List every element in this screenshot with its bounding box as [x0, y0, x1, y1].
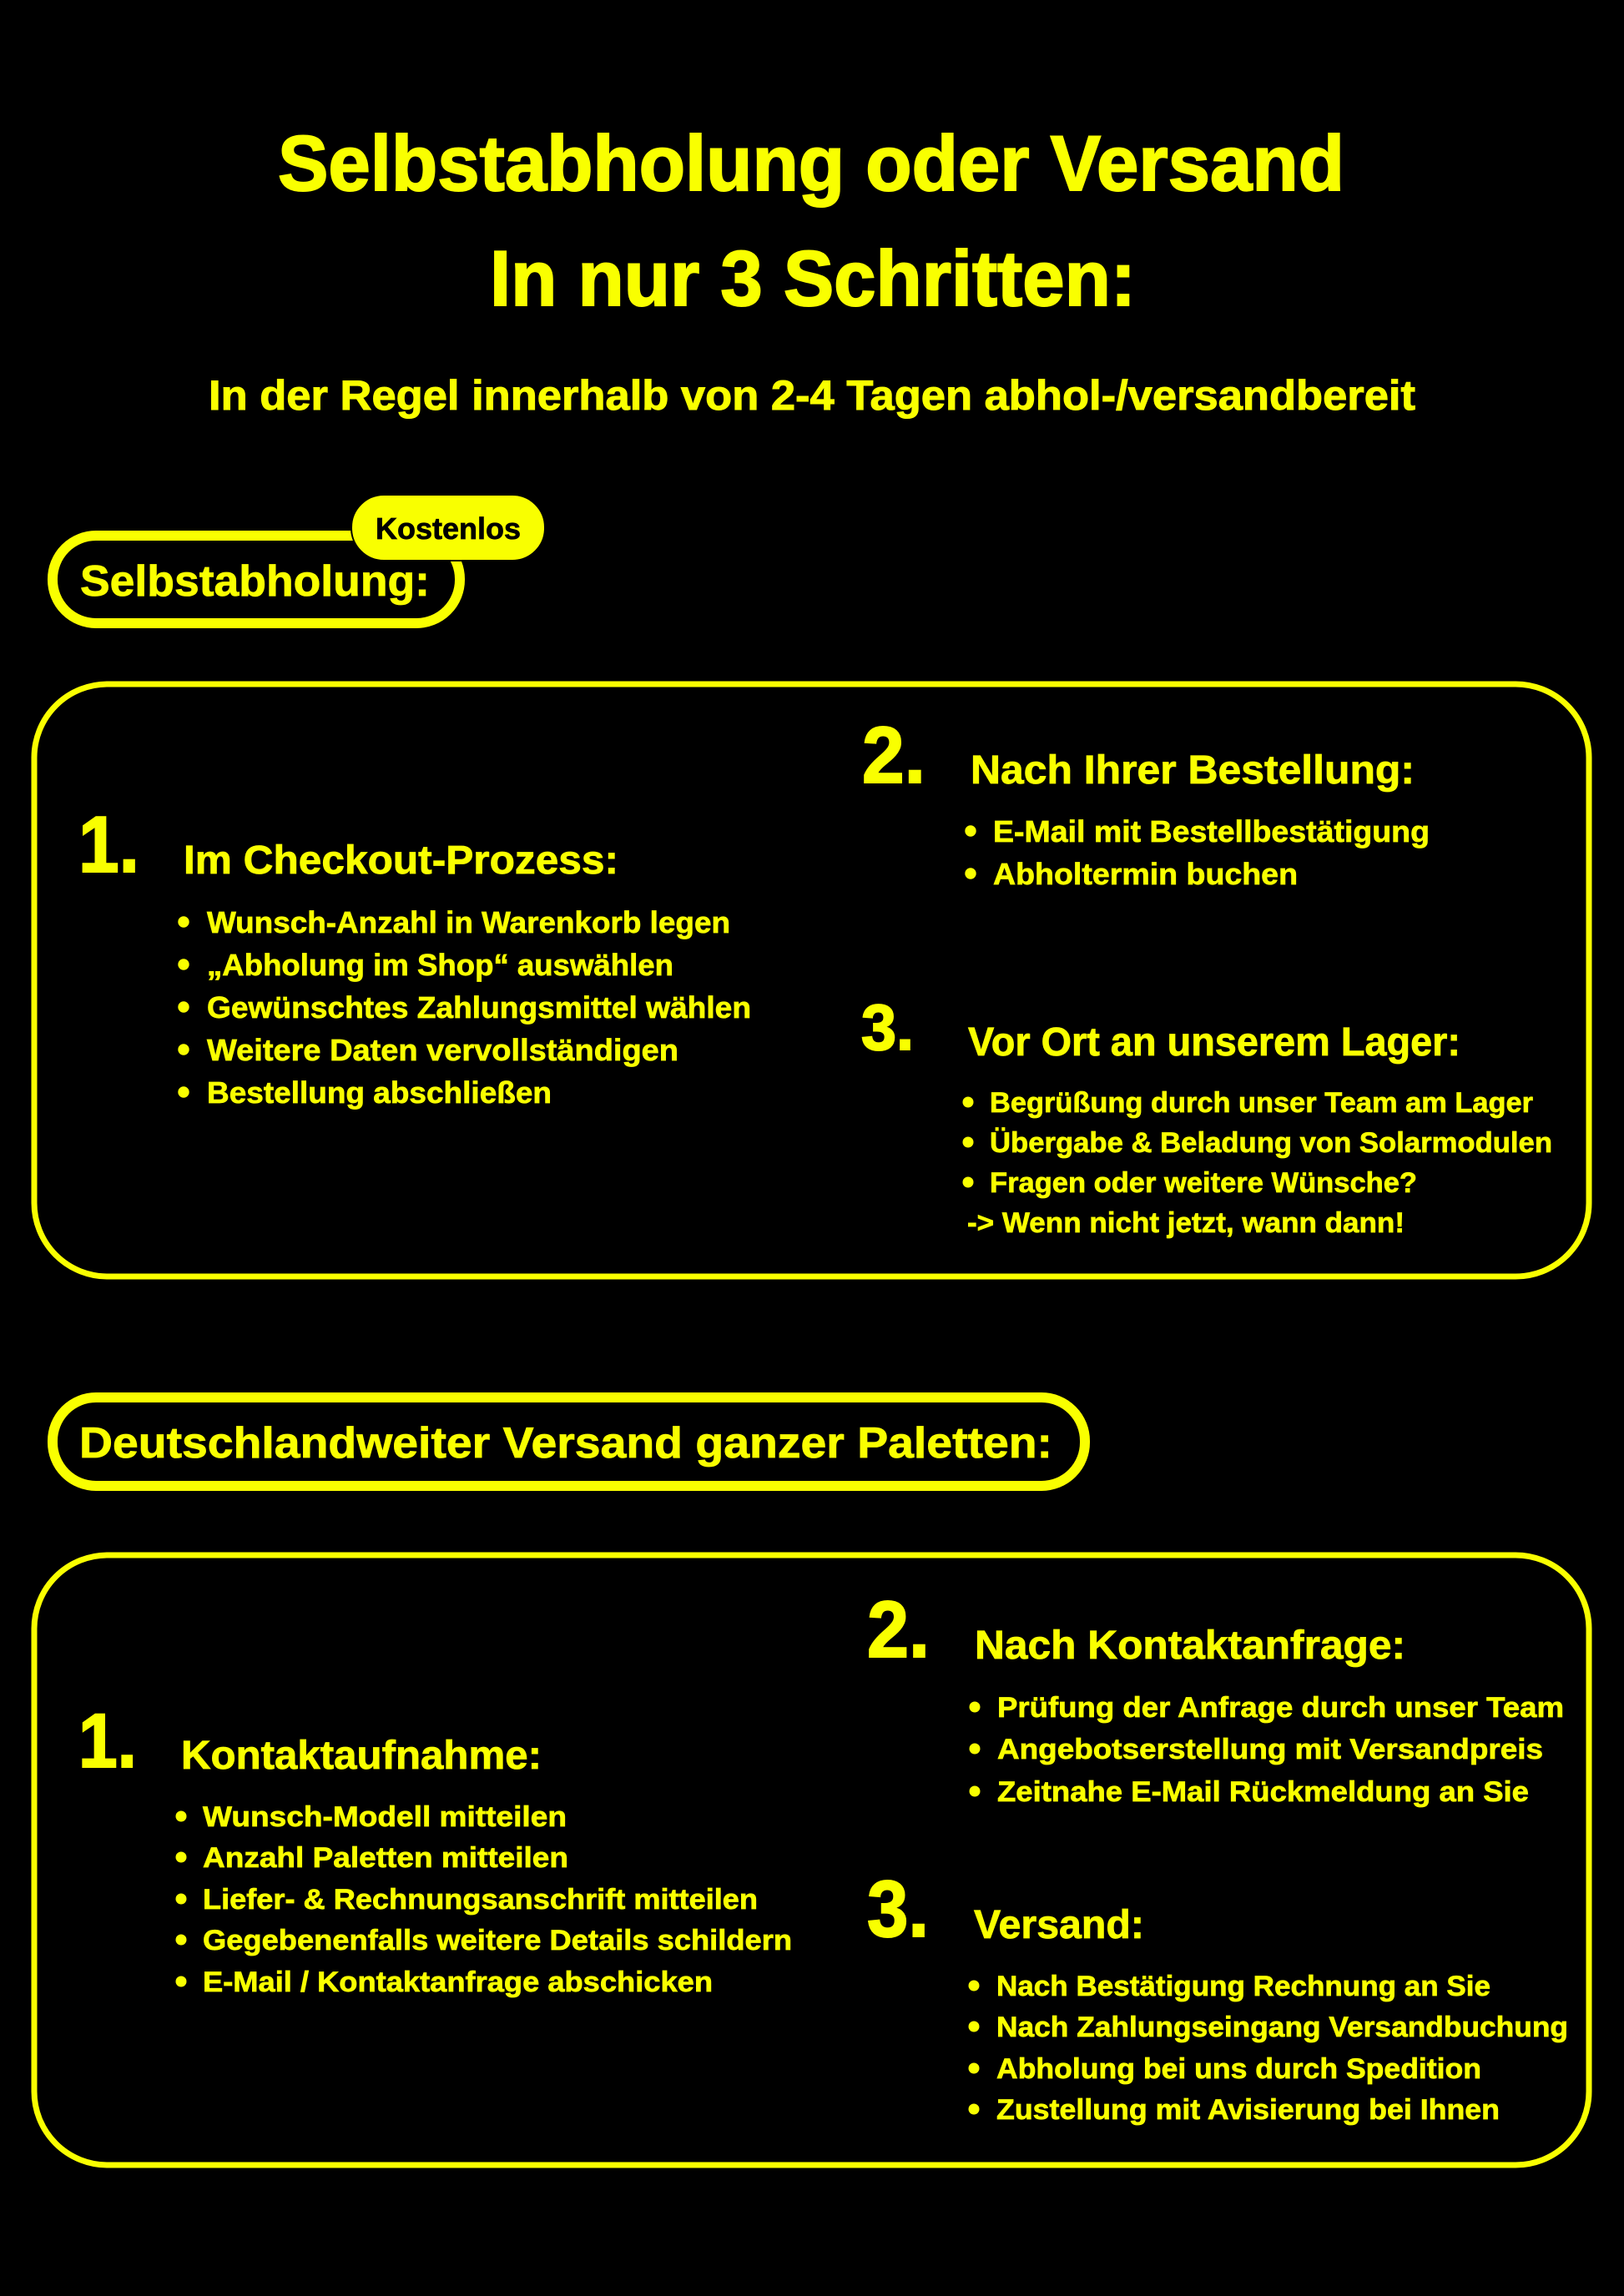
step 3: Versand: 3.	[867, 1865, 929, 1954]
step 3: Vor Ort an unserem Lager: Begrüßung durch unser Team am Lager	[990, 1087, 1533, 1119]
step 3: Vor Ort an unserem Lager: Fragen oder weitere Wünsche?	[990, 1167, 1417, 1199]
subtitle: In der Regel innerhalb von 2-4 Tagen abhol-/versandbereit	[209, 372, 1415, 419]
step 1: Im Checkout-Prozess: Bestellung abschließen	[207, 1075, 552, 1110]
step 1: Kontaktaufnahme: Anzahl Paletten mitteilen	[203, 1842, 568, 1874]
badge: Kostenlos: Kostenlos	[376, 511, 521, 546]
step 2: Nach Ihrer Bestellung: Abholtermin buchen	[993, 857, 1298, 891]
step 1: Kontaktaufnahme: Gegebenenfalls weitere Details schildern	[203, 1925, 792, 1956]
step 2: Nach Kontaktanfrage: Angebotserstellung mit Versandpreis	[997, 1734, 1543, 1765]
step 2: Nach Ihrer Bestellung: E-Mail mit Bestellbestätigung	[993, 814, 1430, 848]
step 3: Versand: Abholung bei uns durch Spedition	[996, 2053, 1481, 2085]
step 3: Versand: Versand:	[974, 1903, 1144, 1947]
step 1: Im Checkout-Prozess: Im Checkout-Prozess:	[184, 838, 618, 883]
section heading: Versand	[53, 1397, 1085, 1486]
step 3: Versand: Nach Zahlungseingang Versandbuchung	[996, 2012, 1568, 2043]
step 2: Nach Ihrer Bestellung: Nach Ihrer Bestellung:	[971, 748, 1415, 793]
step 1: Kontaktaufnahme: 1.	[78, 1699, 137, 1784]
step 1: Im Checkout-Prozess: Gewünschtes Zahlungsmittel wählen	[207, 990, 751, 1025]
title: Selbstabholung oder Versand	[278, 119, 1344, 207]
title	[278, 119, 1344, 322]
step 1: Im Checkout-Prozess: 1.	[78, 800, 139, 889]
step 2: Nach Ihrer Bestellung: 2.	[862, 711, 925, 800]
step 3: Versand: Zustellung mit Avisierung bei Ihnen	[996, 2094, 1500, 2126]
panel: Versand steps	[34, 1555, 1589, 2165]
step 1: Im Checkout-Prozess	[78, 800, 751, 1110]
step 2: Nach Kontaktanfrage: 2.	[867, 1585, 930, 1674]
step 3: Vor Ort an unserem Lager: -> Wenn nicht jetzt, wann dann!	[967, 1207, 1405, 1239]
step 2: Nach Kontaktanfrage: Zeitnahe E-Mail Rückmeldung an Sie	[997, 1776, 1529, 1808]
step 3: Versand: Nach Bestätigung Rechnung an Sie	[996, 1971, 1490, 2002]
step 1: Im Checkout-Prozess: Wunsch-Anzahl in Warenkorb legen	[207, 905, 730, 939]
step 2: Nach Kontaktanfrage: Prüfung der Anfrage durch unser Team	[997, 1692, 1564, 1724]
step 1: Im Checkout-Prozess: Weitere Daten vervollständigen	[207, 1033, 678, 1067]
step 1: Kontaktaufnahme	[78, 1699, 792, 1998]
section heading: Versand: Deutschlandweiter Versand ganzer Paletten:	[79, 1419, 1052, 1468]
step 2: Nach Kontaktanfrage	[867, 1585, 1564, 1808]
step 1: Kontaktaufnahme: Liefer- & Rechnungsanschrift mitteilen	[203, 1884, 758, 1916]
section heading: Selbstabholung	[53, 536, 460, 623]
step 1: Kontaktaufnahme: E-Mail / Kontaktanfrage abschicken	[203, 1966, 713, 1998]
step 3: Vor Ort an unserem Lager: Übergabe & Beladung von Solarmodulen	[990, 1127, 1552, 1159]
section heading: Selbstabholung: Selbstabholung:	[80, 557, 430, 606]
step 3: Vor Ort an unserem Lager: 3.	[861, 992, 914, 1064]
step 3: Versand	[867, 1865, 1568, 2126]
step 1: Kontaktaufnahme: Wunsch-Modell mitteilen	[203, 1801, 567, 1833]
step 3: Vor Ort an unserem Lager: Vor Ort an unserem Lager:	[968, 1020, 1460, 1065]
step 2: Nach Kontaktanfrage: Nach Kontaktanfrage:	[975, 1624, 1405, 1668]
step 1: Kontaktaufnahme: Kontaktaufnahme:	[181, 1734, 542, 1778]
step 1: Im Checkout-Prozess: „Abholung im Shop“ auswählen	[207, 948, 673, 982]
step 2: Nach Ihrer Bestellung	[862, 711, 1430, 891]
panel: Selbstabholung steps	[34, 684, 1589, 1276]
step 3: Vor Ort an unserem Lager	[861, 992, 1552, 1239]
badge: Kostenlos	[351, 495, 545, 561]
title: In nur 3 Schritten:	[490, 234, 1136, 322]
